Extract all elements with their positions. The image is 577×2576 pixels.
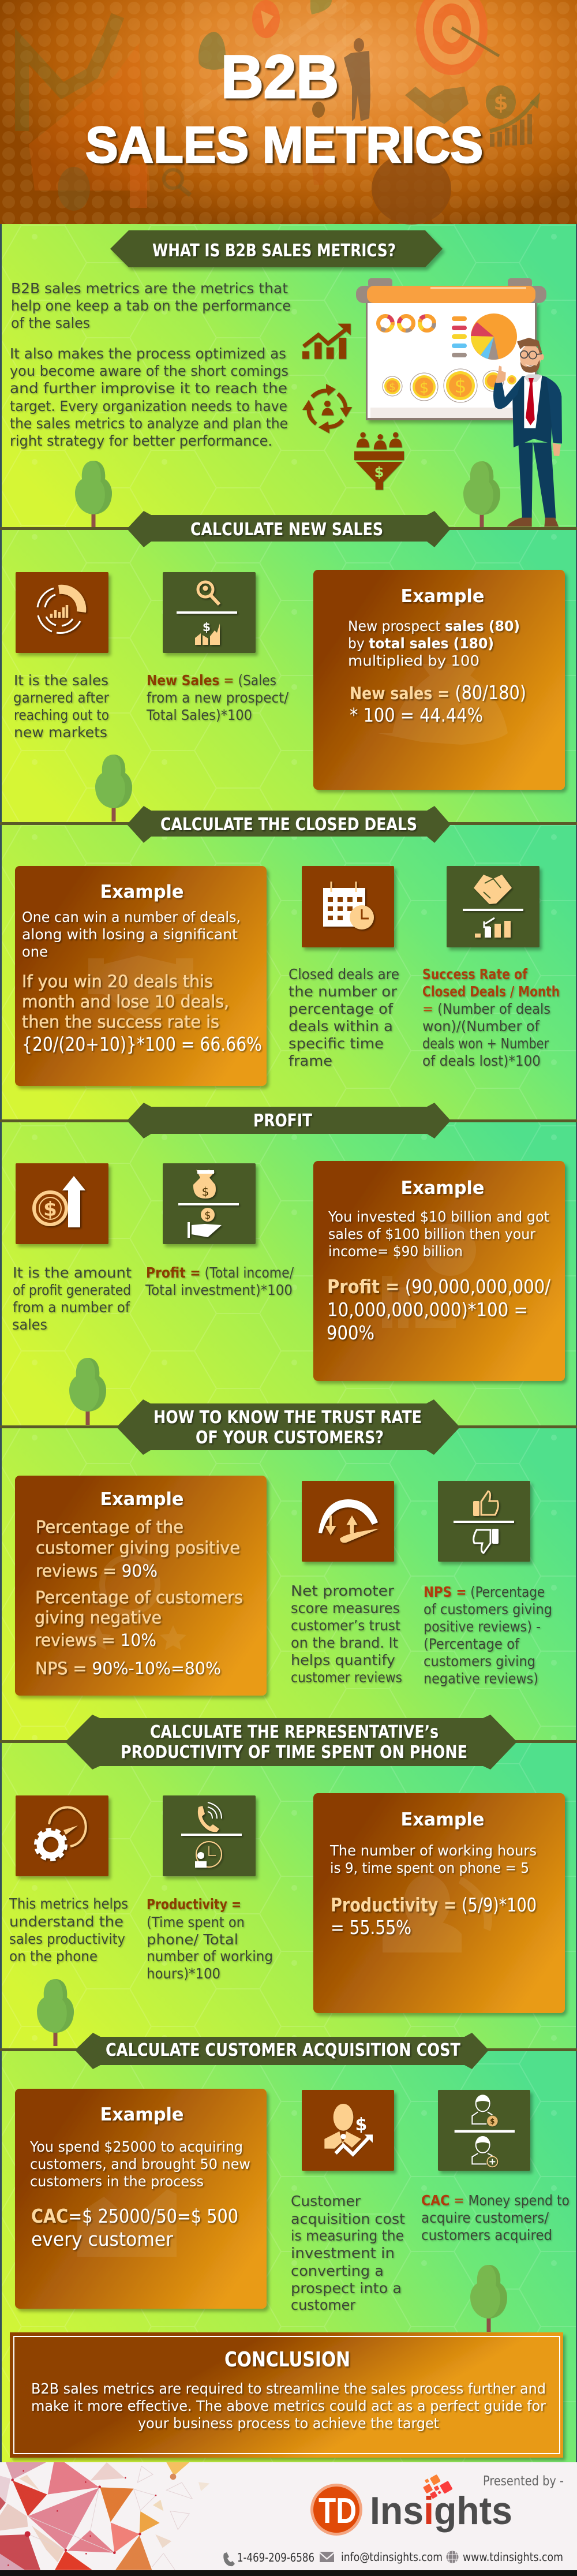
section: calculate new sales <box>0 511 577 822</box>
icons: growth, cycle, funnel <box>302 324 404 490</box>
contact: website: www.tdinsights.com <box>463 2550 563 2564</box>
tree <box>470 2265 507 2332</box>
example text: Example <box>100 1489 183 1510</box>
heading banner: CALCULATE CUSTOMER ACQUISITION COST <box>106 2040 460 2060</box>
header banner <box>0 0 577 225</box>
text: NPS formula: NPS = (Percentage <box>424 1584 545 1600</box>
contact: email: info@tdinsights.com <box>341 2550 443 2564</box>
example text: by total sales (180) <box>348 635 494 652</box>
text: closed deals description: percentage of <box>288 1000 394 1017</box>
heading banner <box>65 1715 517 1769</box>
example text: Example <box>400 1809 485 1830</box>
text: productivity description: on the phone <box>9 1948 98 1965</box>
text: closed deals description: Closed deals are <box>288 966 399 983</box>
heading banner: OF YOUR CUSTOMERS? <box>196 1428 384 1448</box>
text: new sales formula: New Sales = (Sales <box>147 672 276 689</box>
icon tile: calendar <box>302 866 394 947</box>
text block: definition: and further improvise it to reach the <box>10 380 287 397</box>
heading banner: PRODUCTIVITY OF TIME SPENT ON PHONE <box>121 1742 467 1763</box>
example text <box>22 882 262 1055</box>
text: net promoter description: customer’s trust <box>291 1617 400 1634</box>
text: closed deals formula: of deals lost)*100 <box>422 1052 541 1069</box>
example text <box>329 1809 537 1939</box>
example text <box>29 2104 250 2250</box>
example text: Example <box>100 882 183 902</box>
example text: If you win 20 deals this <box>22 972 213 991</box>
text: new sales formula: Total Sales)*100 <box>146 707 252 723</box>
tree <box>37 1979 74 2046</box>
text: closed deals formula: = (Number of deals <box>422 1000 550 1017</box>
text: new sales description: new markets <box>14 724 107 741</box>
text: productivity formula: (Time spent on <box>147 1914 245 1931</box>
icon tile: thumbs fraction <box>438 1481 530 1562</box>
text: customer acquisition description: customer <box>291 2297 356 2313</box>
conclusion panel <box>10 2332 563 2458</box>
divider line <box>0 1425 577 1428</box>
icon tile: profit up <box>16 1163 108 1244</box>
text: NPS formula: (Percentage of <box>424 1636 520 1652</box>
text: net promoter description: on the brand. It <box>291 1634 398 1651</box>
text block: definition: you become aware of the short comings <box>10 363 288 379</box>
text: closed deals formula: deals won + Number <box>422 1035 549 1052</box>
text: new sales description: It is the sales <box>14 672 108 689</box>
section: customer acquisition cost <box>0 2033 577 2332</box>
text: NPS formula: negative reviews) <box>424 1670 538 1687</box>
text: customer acquisition description: converting a <box>291 2263 384 2279</box>
text: productivity formula: hours)*100 <box>147 1965 220 1982</box>
text: productivity description <box>9 1895 128 1965</box>
tree <box>75 461 112 528</box>
text block: definition: of the sales <box>11 315 90 331</box>
text: productivity formula: phone/ Total <box>147 1931 238 1948</box>
icon text: funnel dollar: $ <box>374 464 384 480</box>
tree <box>463 461 500 528</box>
text: customer acquisition description <box>291 2193 405 2313</box>
example text: customer giving positive <box>36 1538 240 1558</box>
example text: every customer <box>31 2228 173 2250</box>
heading banner <box>127 1103 451 1138</box>
heading banner <box>75 2033 489 2069</box>
example text: reviews = 90% <box>36 1561 158 1581</box>
example text: One can win a number of deals, <box>22 909 241 925</box>
example text: = 55.55% <box>331 1916 411 1939</box>
heading banner <box>110 230 443 267</box>
text: customer acquisition description: prospect into a <box>291 2280 402 2297</box>
example panel: NPS <box>15 1476 267 1696</box>
text: net promoter description: Net promoter <box>291 1582 395 1599</box>
example text: month and lose 10 deals, <box>22 992 229 1011</box>
example text <box>348 586 526 726</box>
text: new sales description: garnered after <box>13 689 110 706</box>
text: closed deals formula <box>422 966 560 1069</box>
text: closed deals formula: won)/(Number of <box>422 1018 540 1035</box>
example text: Percentage of customers <box>35 1588 243 1607</box>
conclusion text: your business process to achieve the target <box>138 2415 439 2432</box>
divider line <box>0 1740 577 1743</box>
example text: Example <box>100 2104 183 2125</box>
example text: New prospect sales (80) <box>348 618 520 634</box>
text: closed deals description <box>288 966 399 1069</box>
text: profit formula <box>145 1264 294 1298</box>
watermark icon: agent with headset <box>383 1875 492 1952</box>
logo: TD Insights: TD <box>319 2491 357 2531</box>
text: customer acquisition description: Customer <box>291 2193 361 2209</box>
footer panel <box>0 2462 577 2576</box>
section: trust rate of customers <box>0 1399 577 1696</box>
text block: definition <box>10 280 291 449</box>
watermark icon: gauge and stars <box>85 1557 186 1650</box>
text: productivity formula: Productivity = <box>147 1896 241 1913</box>
example panel: closed deals <box>15 866 267 1086</box>
text block: definition: target. Every organization needs to have <box>10 398 287 415</box>
example text <box>327 1178 551 1344</box>
tree <box>69 1358 106 1425</box>
text: NPS formula: of customers giving <box>424 1601 552 1618</box>
text block: definition: help one keep a tab on the performance <box>11 297 291 314</box>
example text: * 100 = 44.44% <box>350 704 483 726</box>
text: closed deals description: deals within a <box>288 1018 393 1035</box>
text: profit description: of profit generated <box>13 1282 131 1298</box>
text: NPS formula: positive reviews) - <box>424 1618 541 1635</box>
tree <box>95 755 132 822</box>
watermark icon: rising bars <box>77 2189 177 2257</box>
illustration: presentation board: $ <box>455 375 466 397</box>
text: net promoter description: score measures <box>291 1600 400 1616</box>
conclusion text: B2B sales metrics are required to streamline the sales process further and <box>31 2380 546 2397</box>
text: net promoter description: helps quantify <box>291 1652 395 1668</box>
text: net promoter description: customer reviews <box>291 1669 402 1686</box>
text: new sales description: reaching out to <box>14 707 109 723</box>
example text: one <box>22 943 48 960</box>
heading banner: CALCULATE THE CLOSED DEALS <box>160 815 417 835</box>
watermark icon: coin and bars <box>382 1224 476 1328</box>
example text: NPS = 90%-10%=80% <box>35 1659 221 1678</box>
text: profit description: sales <box>12 1316 47 1333</box>
divider line <box>0 1119 577 1122</box>
example text: Productivity = (5/9)*100 <box>331 1894 537 1916</box>
example panel: productivity <box>313 1793 565 2013</box>
example text: You invested $10 billion and got <box>328 1208 549 1225</box>
icon tile: speedometer <box>302 1481 394 1562</box>
example text: along with losing a significant <box>22 926 238 943</box>
example panel: profit <box>313 1161 565 1381</box>
header banner: $ <box>493 91 508 115</box>
presented by: Presented by - <box>483 2474 564 2489</box>
example text: The number of working hours <box>329 1842 537 1859</box>
conclusion heading: CONCLUSION <box>224 2348 350 2372</box>
icon tile: customer investment: $ <box>355 2115 367 2135</box>
section: representative productivity on phone <box>0 1715 577 2046</box>
text: new sales formula <box>146 672 289 723</box>
example text: 900% <box>327 1321 374 1344</box>
illustration: businessman presenter <box>493 338 562 527</box>
example text: customers, and brought 50 new <box>30 2156 250 2172</box>
text: closed deals description: the number or <box>288 983 398 1000</box>
example text: multiplied by 100 <box>348 652 479 669</box>
divider line <box>0 2048 577 2051</box>
example text: New sales = (80/180) <box>350 681 526 704</box>
example text: Example <box>400 1178 485 1199</box>
heading banner <box>127 511 451 547</box>
contact: phone <box>223 2551 314 2566</box>
icon tile: profit fraction <box>163 1163 256 1244</box>
text: productivity description: This metrics helps <box>9 1895 128 1912</box>
example text: You spend $25000 to acquiring <box>29 2138 243 2155</box>
illustration: presentation board: $ <box>419 379 429 397</box>
heading banner: WHAT IS B2B SALES METRICS? <box>152 241 396 261</box>
text: profit description <box>12 1264 132 1333</box>
example text: customers in the process <box>30 2173 204 2190</box>
watermark icon: money bag <box>378 664 508 745</box>
section: profit <box>0 1103 577 1425</box>
text block: definition: It also makes the process optimized as <box>10 345 286 362</box>
text: new sales formula: from a new prospect/ <box>147 689 289 706</box>
icon tile: profit fraction: $ <box>204 1209 211 1222</box>
text: closed deals description: specific time <box>288 1035 384 1052</box>
contact: phone: 1-469-209-6586 <box>237 2551 314 2564</box>
icon tile: new sales fraction: $ <box>203 620 211 634</box>
divider line <box>0 527 577 530</box>
icon tile: chart ring <box>16 572 108 653</box>
text: customer acquisition description: investment in <box>291 2245 395 2261</box>
decoration: polygon triangles <box>0 2462 209 2570</box>
icon tile: CAC fraction: $ <box>490 2117 495 2125</box>
logo: TD Insights <box>310 2474 512 2536</box>
heading banner: CALCULATE NEW SALES <box>190 520 383 540</box>
section: calculate the closed deals <box>0 806 577 1086</box>
icon tile: profit fraction: $ <box>202 1185 209 1199</box>
heading banner: CALCULATE THE REPRESENTATIVE’s <box>150 1722 439 1742</box>
example text: is 9, time spent on phone = 5 <box>330 1860 529 1876</box>
example text: 10,000,000,000)*100 = <box>327 1298 528 1321</box>
text: profit formula: Profit = (Total income/ <box>146 1264 294 1281</box>
example text: Example <box>400 586 485 607</box>
text block: definition: the sales metrics to analyze and plan the <box>10 415 288 432</box>
example panel: new sales <box>313 570 565 790</box>
text: productivity description: sales productivity <box>9 1931 125 1947</box>
title: B2B <box>221 43 339 111</box>
illustration: presentation board <box>356 278 546 420</box>
heading banner: PROFIT <box>253 1111 312 1131</box>
text: closed deals description: frame <box>288 1052 332 1069</box>
text: profit description: from a number of <box>13 1299 130 1316</box>
example text: {20/(20+10)}*100 = 66.66% <box>22 1033 262 1055</box>
title <box>85 43 483 173</box>
icon tile: new sales fraction <box>163 572 256 653</box>
example text: reviews = 10% <box>35 1630 156 1650</box>
example text: sales of $100 billion then your <box>328 1226 536 1242</box>
example text: giving negative <box>35 1608 162 1627</box>
icon tile: profit up: $ <box>43 1198 57 1221</box>
text: closed deals formula: Success Rate of <box>422 966 528 983</box>
watermark icon: handshake <box>88 955 193 1022</box>
example text: income= $90 billion <box>328 1243 463 1260</box>
icon tile: gear gauge <box>16 1795 108 1876</box>
conclusion text: make it more effective. The above metrics could act as a perfect guide for <box>31 2398 546 2414</box>
text: NPS formula: customers giving <box>424 1653 535 1670</box>
icon tile: deals fraction <box>447 866 539 947</box>
icon tile: customer investment <box>302 2090 394 2171</box>
icon tile: CAC fraction <box>438 2090 530 2171</box>
text: net promoter description <box>291 1582 402 1686</box>
example text <box>35 1489 243 1678</box>
text: CAC formula <box>421 2192 569 2243</box>
text block: definition: B2B sales metrics are the metrics that <box>11 280 288 297</box>
section: what is B2B sales metrics <box>10 230 546 528</box>
text: productivity formula: number of working <box>147 1948 273 1965</box>
example text: Profit = (90,000,000,000/ <box>327 1275 551 1298</box>
text: NPS formula <box>424 1584 552 1687</box>
text: CAC formula: customers acquired <box>421 2227 552 2243</box>
title: SALES METRICS <box>85 116 483 173</box>
example text: CAC=$ 25000/50=$ 500 <box>31 2205 238 2227</box>
heading banner <box>117 1399 460 1455</box>
example text: Percentage of the <box>36 1517 183 1537</box>
illustration: presentation board: $ <box>389 381 396 393</box>
text: CAC formula: acquire customers/ <box>421 2209 549 2226</box>
example panel: CAC <box>15 2089 267 2309</box>
logo: TD Insights: Insights <box>370 2489 512 2533</box>
conclusion text <box>31 2380 546 2432</box>
text: productivity description: understand the <box>9 1913 123 1930</box>
text block: definition: right strategy for better performance. <box>10 432 272 449</box>
heading banner <box>127 806 451 843</box>
text: profit description: It is the amount <box>13 1264 132 1281</box>
example text: then the success rate is <box>22 1012 219 1032</box>
icon tile: phone fraction <box>163 1795 256 1876</box>
text: customer acquisition description: is measuring the <box>291 2227 404 2244</box>
text: profit formula: Total investment)*100 <box>145 1282 293 1298</box>
text: customer acquisition description: acquisition cost <box>291 2211 405 2227</box>
heading banner: HOW TO KNOW THE TRUST RATE <box>153 1408 422 1428</box>
text: productivity formula <box>147 1896 273 1982</box>
text: new sales description <box>13 672 110 741</box>
divider line <box>0 822 577 825</box>
